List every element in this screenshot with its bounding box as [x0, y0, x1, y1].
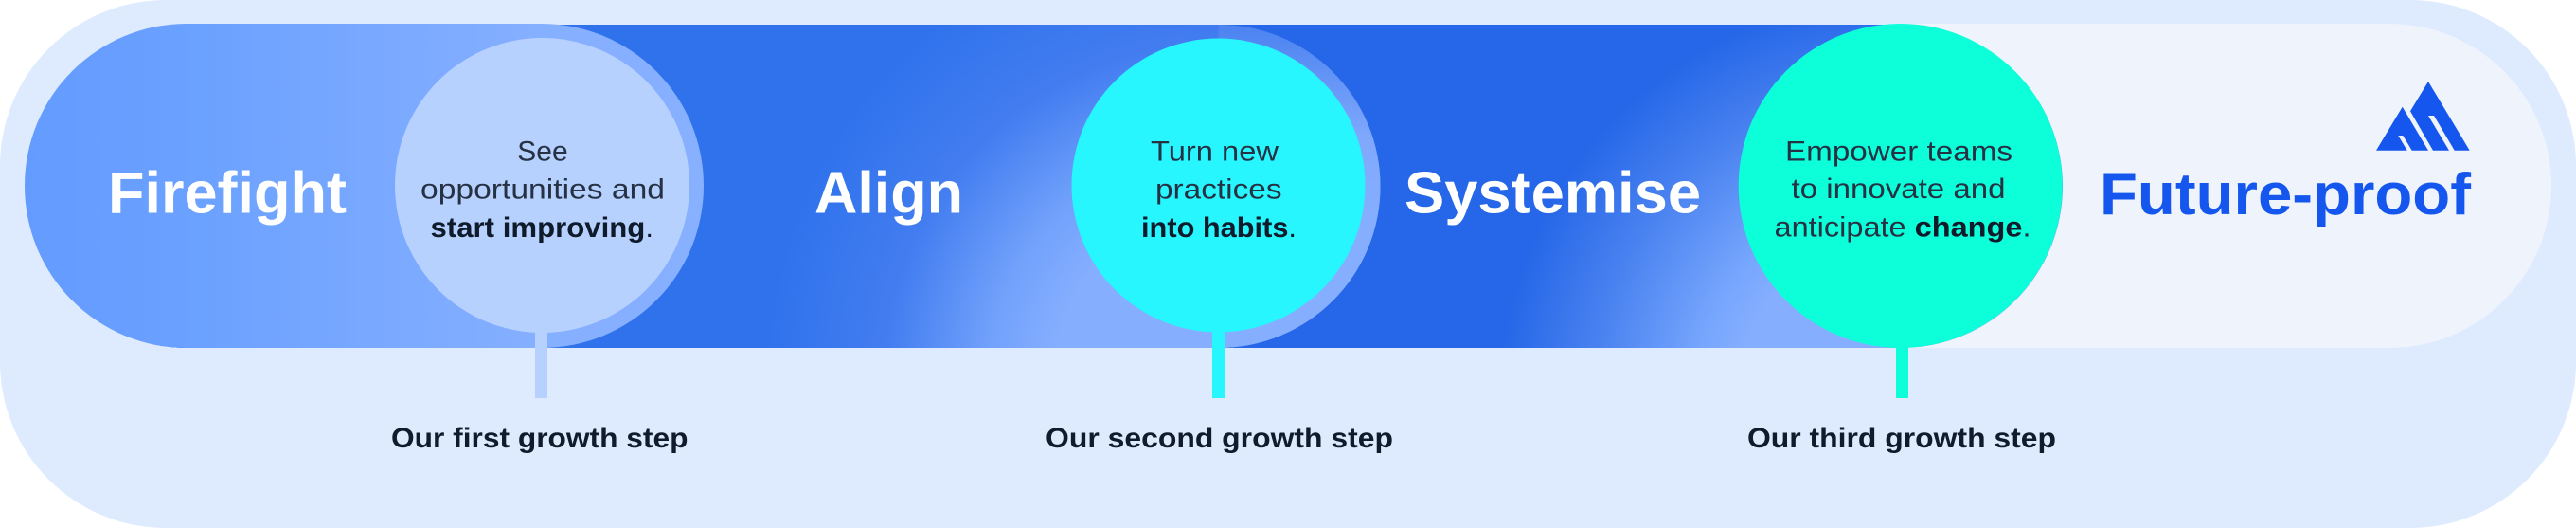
- text: step 1 description: start improving .: [430, 212, 653, 244]
- step 1 connector: [535, 327, 547, 398]
- panel: align band end cap: [1218, 25, 1381, 348]
- text: step 1 description: See: [517, 137, 568, 167]
- label: third growth step: Our third growth step: [1747, 423, 2056, 454]
- panel: future-proof track: [1739, 24, 2551, 348]
- icon: mountain logo: [2376, 82, 2470, 151]
- heading: Align: Align: [814, 161, 963, 226]
- step 2 circle: [1072, 38, 1366, 332]
- heading: Future-proof: Future-proof: [2100, 162, 2471, 228]
- heading: Systemise: Systemise: [1404, 161, 1701, 226]
- text: step 2 description: into habits.: [1141, 212, 1297, 244]
- step 2 connector: [1212, 327, 1225, 398]
- text: step 3 description: anticipate change .: [1775, 212, 2030, 243]
- text: step 3 description: Empower teams: [1785, 137, 2012, 167]
- step 1 circle: [395, 38, 689, 333]
- panel: align band: [26, 25, 1381, 348]
- text: step 3 description: to innovate and: [1792, 173, 2006, 205]
- text: step 2 description: [1141, 137, 1297, 244]
- heading: Firefight: Firefight: [108, 161, 347, 226]
- text: step 2 description: practices: [1155, 174, 1282, 205]
- step 3 circle: [1739, 24, 2063, 348]
- panel: systemise band: [26, 25, 2063, 348]
- text: step 1 description: opportunities and: [420, 174, 665, 205]
- text: step 1 description: [420, 137, 665, 244]
- text: step 2 description: Turn new: [1151, 137, 1279, 167]
- label: second growth step: Our second growth step: [1046, 423, 1393, 454]
- panel: firefight band: [25, 24, 704, 348]
- text: step 3 description: [1775, 137, 2030, 243]
- label: first growth step: Our first growth step: [391, 423, 688, 454]
- step 3 connector: [1896, 341, 1908, 398]
